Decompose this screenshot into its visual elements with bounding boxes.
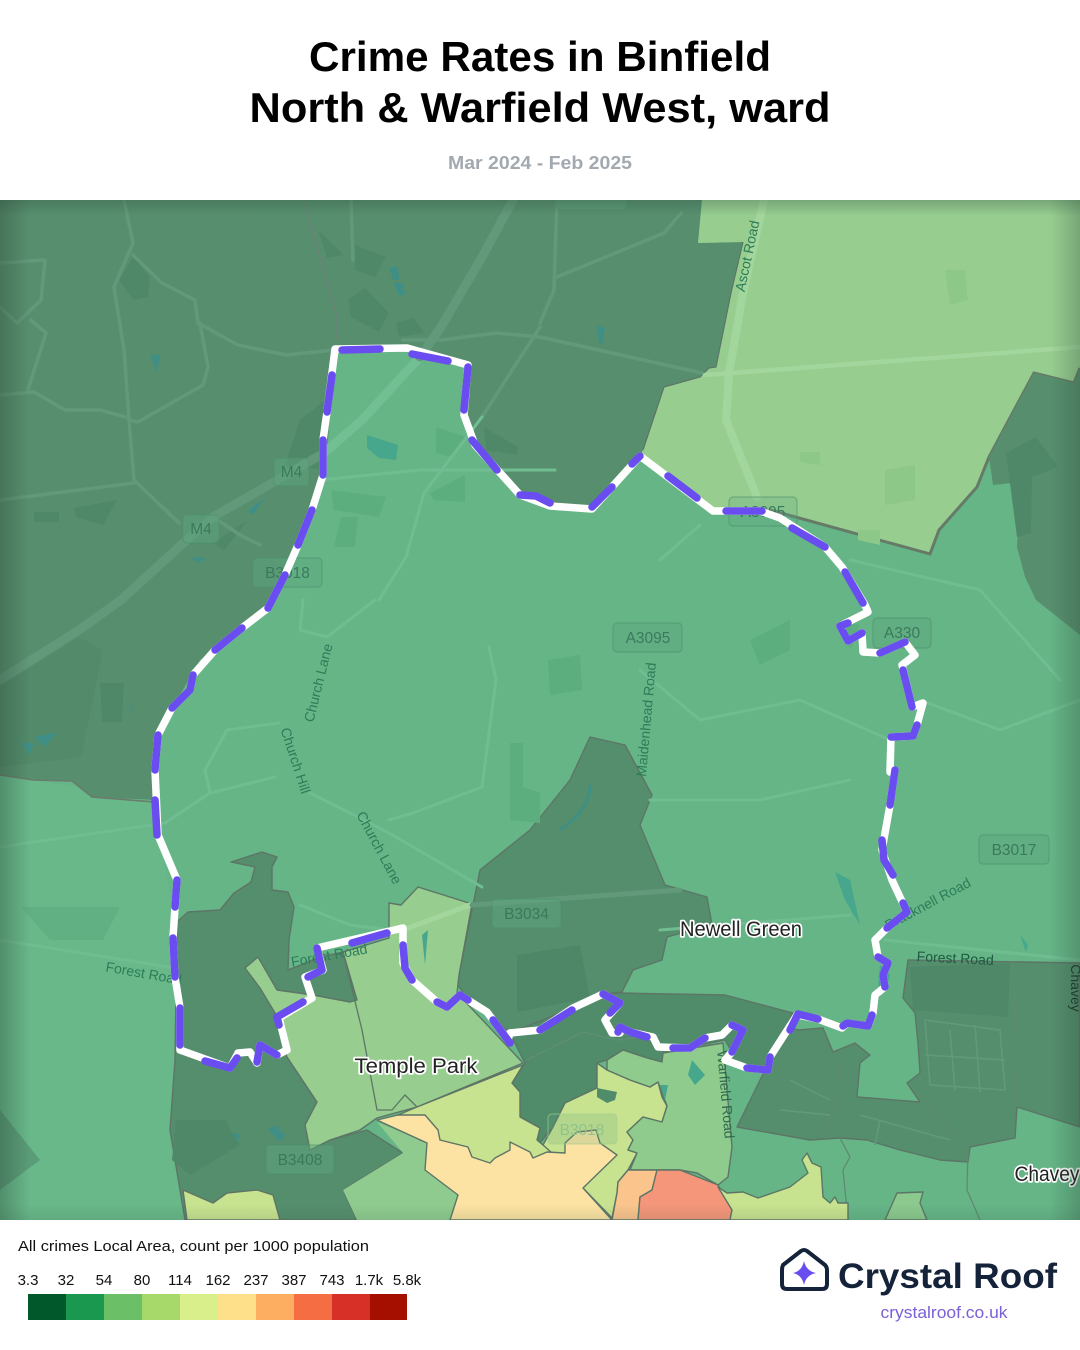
legend tick labels: 387 — [281, 1272, 307, 1289]
area: yellow-green centre — [543, 1063, 667, 1218]
ward boundary: white base — [155, 348, 923, 1070]
road label: top edge — [556, 200, 626, 210]
title: Crime Rates in Binfield — [309, 33, 771, 80]
logo: Crystal Roof — [782, 1250, 1057, 1322]
road label: B3018 — [253, 558, 322, 587]
legend tick labels: 162 — [205, 1272, 231, 1289]
road name: Forest Road east: Forest Road — [916, 948, 994, 968]
area: south-west dark green — [170, 852, 403, 1220]
area: north-east light green — [640, 200, 1080, 554]
road label: B3408: B3408 — [278, 1152, 322, 1169]
title — [250, 33, 830, 131]
road label: B3017 — [979, 835, 1049, 864]
ward boundary: purple dashes — [155, 349, 917, 1070]
legend tick labels: 32 — [58, 1272, 74, 1289]
title: North & Warfield West, ward — [250, 84, 830, 131]
legend title: All crimes Local Area, count per 1000 population — [18, 1238, 369, 1255]
area: south-east dark green — [737, 960, 1080, 1162]
road label: B3034 — [492, 899, 561, 928]
road label: A330: A330 — [884, 625, 920, 642]
area: orange — [612, 1170, 657, 1220]
road label: B3408 — [266, 1145, 334, 1174]
road name: Bracknell Road: Bracknell Road — [882, 874, 973, 933]
road label: B3034: B3034 — [504, 906, 549, 923]
legend tick labels: 3.3 — [18, 1272, 38, 1289]
wordmark: Crystal Roof — [838, 1257, 1057, 1296]
road name: Church Lane: Church Lane — [301, 642, 336, 724]
area: east dark green — [989, 368, 1080, 635]
area: west mid green — [0, 775, 185, 1220]
road label: A330 — [873, 618, 931, 648]
area: yellow-green west — [398, 1064, 550, 1162]
legend tick labels: 5.8k — [393, 1272, 422, 1289]
legend — [18, 1238, 422, 1320]
legend colour bar — [28, 1294, 407, 1320]
road label: M4: M4 — [281, 464, 303, 481]
road label: M4 — [183, 515, 219, 543]
road label: M4: M4 — [190, 521, 212, 538]
road label: B3018: B3018 — [265, 565, 310, 582]
icon: house with star — [782, 1250, 827, 1289]
legend tick labels: 80 — [134, 1272, 150, 1289]
legend tick labels: 1.7k — [355, 1272, 384, 1289]
road name: Warfield Road: Warfield Road — [714, 1050, 738, 1139]
roads and woodland detail — [79, 249, 516, 713]
road name: Forest Road west: Forest Road — [105, 959, 183, 988]
road label: A3095: A3095 — [626, 630, 670, 647]
area: southern dark band — [510, 993, 793, 1143]
area: mid-light green centre — [607, 1043, 732, 1185]
road label: A3095 north: A3095 — [741, 504, 785, 521]
choropleth map — [0, 190, 1080, 1220]
area: cream — [377, 1115, 617, 1220]
road label: A3095 north — [729, 497, 797, 526]
website: crystalroof.co.uk — [880, 1304, 1008, 1322]
road name: Maidenhead Road: Maidenhead Road — [633, 662, 659, 777]
legend tick labels: 743 — [319, 1272, 345, 1289]
area: salmon — [638, 1170, 732, 1220]
legend tick labels: 54 — [96, 1272, 112, 1289]
area: south-west patch — [183, 1190, 280, 1220]
area: light green south-east — [885, 1192, 927, 1220]
road label: A3095 — [613, 623, 682, 652]
area: south-west corner dark — [0, 1110, 40, 1190]
road name: Ascot Road: Ascot Road — [732, 219, 762, 293]
road label: B3018 south: B3018 — [560, 1122, 604, 1139]
place label: Newell Green: Newell Green — [680, 918, 802, 941]
legend tick labels: 237 — [243, 1272, 269, 1289]
road label: B3018 south — [548, 1114, 617, 1144]
legend tick labels: 114 — [168, 1272, 192, 1289]
subtitle: date range: Mar 2024 - Feb 2025 — [448, 153, 632, 173]
road name: Church Hill: Church Hill — [278, 725, 314, 795]
area: north-west low-crime dark green — [0, 200, 743, 800]
road label: M4 — [274, 458, 309, 486]
road label: B3017: B3017 — [992, 842, 1036, 859]
road name: Church Lane south: Church Lane — [354, 809, 405, 887]
area: Temple Park light green — [245, 887, 523, 1150]
area: yellow-green south — [718, 1153, 848, 1220]
area: central dark green — [458, 737, 712, 1033]
legend tick labels — [18, 1272, 422, 1289]
road name: Forest Road north of Temple Park: Forest Road — [290, 941, 368, 970]
area: light green south of Temple Park — [343, 1122, 458, 1220]
place label: Temple Park: Temple Park — [354, 1055, 478, 1078]
map edge shading — [0, 200, 1080, 1220]
